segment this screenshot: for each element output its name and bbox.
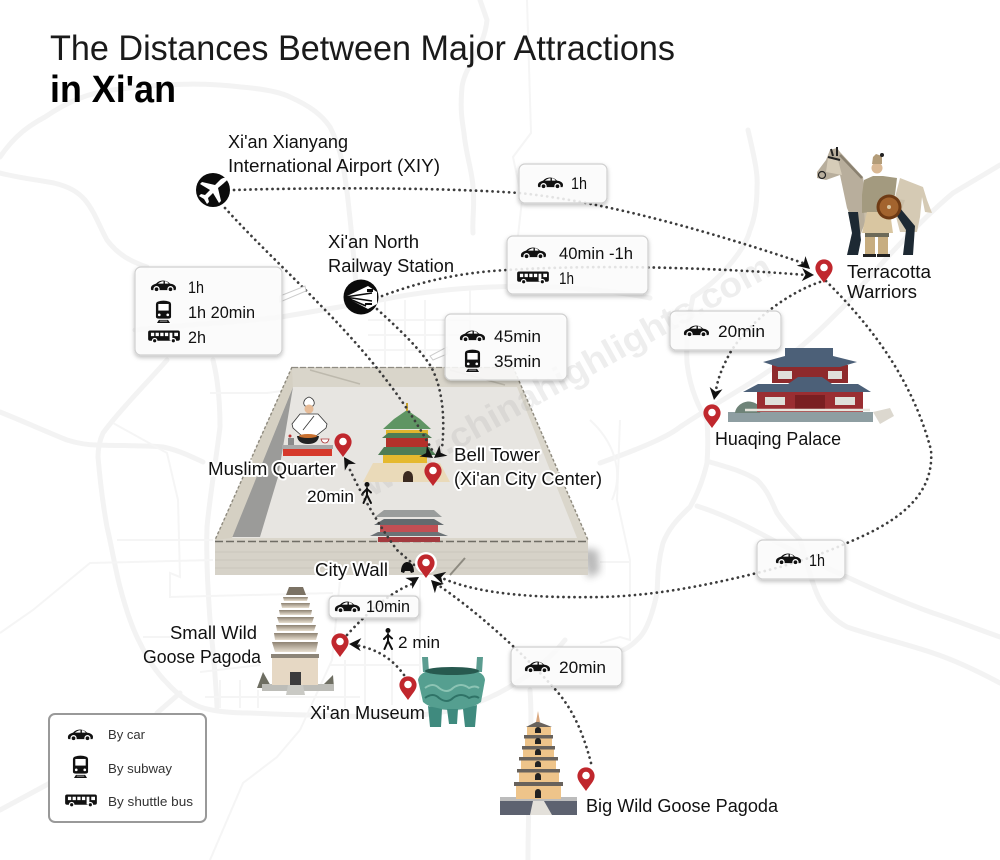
route: airport to Terracotta Warriors <box>234 188 806 264</box>
label: City Wall: City Wall <box>315 560 388 580</box>
legend: By car <box>108 727 146 742</box>
title <box>50 29 675 111</box>
card: airport to Bell Tower: 1h <box>188 278 204 297</box>
label: Terracotta Warriors: Warriors <box>847 282 917 302</box>
label: Huaqing Palace: Huaqing Palace <box>715 429 841 449</box>
label: Small Wild Goose Pagoda: Goose Pagoda <box>143 647 262 667</box>
label: Muslim Quarter: Muslim Quarter <box>208 459 336 479</box>
card: Small Wild Goose Pagoda to City Wall: 10min <box>366 597 410 616</box>
icon: walker to Xi'an Museum <box>384 628 392 649</box>
icon: airport <box>196 173 230 207</box>
label: Small Wild Goose Pagoda: Small Wild <box>170 623 257 643</box>
illustration: Big Wild Goose Pagoda <box>500 711 577 815</box>
label: 20min walk: 20min <box>307 487 354 506</box>
pin: Small Wild Goose Pagoda <box>331 633 349 657</box>
label: Terracotta Warriors: Terracotta <box>847 262 932 282</box>
label: Bell Tower <box>454 445 602 489</box>
label: airport: Xi'an Xianyang <box>228 132 348 152</box>
card: Terracotta Warriors to City Wall: 1h <box>809 551 825 570</box>
route: airport to Bell Tower <box>225 208 432 450</box>
route: Small Wild Goose Pagoda to City Wall <box>347 584 412 635</box>
label: 2 min walk: 2 min <box>398 633 440 652</box>
label: railway station <box>328 232 454 276</box>
route: railway station to Terracotta Warriors <box>382 267 806 296</box>
label: Big Wild Goose Pagoda: Big Wild Goose Pagoda <box>586 796 779 816</box>
card: airport to Terracotta Warriors <box>519 164 607 203</box>
card: railway station to Bell Tower: 35min <box>494 352 541 371</box>
card: Terracotta Warriors to Huaqing Palace <box>670 311 781 350</box>
pin: Xi'an Museum <box>399 676 417 700</box>
label: airport: International Airport (XIY) <box>228 156 440 176</box>
pin: Big Wild Goose Pagoda <box>577 767 595 791</box>
route: railway station to Bell Tower <box>377 309 443 448</box>
watermark: www.chinahighlights.com <box>356 247 778 505</box>
pin: Terracotta Warriors <box>815 259 833 283</box>
arrowheads <box>338 256 814 651</box>
illustration: terracotta warrior and horse <box>817 147 932 257</box>
card: railway station to Terracotta Warriors: 40min -1h <box>559 244 633 263</box>
illustration: chef at Muslim Quarter <box>282 397 333 456</box>
icon: City Wall marker <box>401 562 414 573</box>
card: Terracotta Warriors to City Wall <box>757 540 845 579</box>
illustration: Bell Tower <box>363 403 450 482</box>
illustration: city wall <box>215 367 600 578</box>
route: Xi'an Museum to Small Wild Goose Pagoda <box>356 645 404 675</box>
label: Bell Tower: Bell Tower <box>454 445 540 465</box>
card: Big Wild Goose Pagoda to City Wall: 20min <box>559 658 606 677</box>
title: in Xi'an <box>50 69 176 111</box>
illustration: Huaqing Palace <box>728 348 894 424</box>
pin: Muslim Quarter <box>334 433 352 457</box>
legend <box>49 714 206 822</box>
label: Terracotta Warriors <box>847 262 932 302</box>
label: Xi'an Museum: Xi'an Museum <box>310 703 425 723</box>
legend: By shuttle bus <box>108 794 194 809</box>
route: Terracotta Warriors to Huaqing Palace <box>716 282 820 390</box>
route: Big Wild Goose Pagoda to City Wall <box>438 585 591 763</box>
card: Terracotta Warriors to Huaqing Palace: 20min <box>718 322 765 341</box>
card: railway station to Terracotta Warriors: 1h <box>559 269 574 288</box>
illustration: bronze ding at Xi'an Museum <box>418 657 485 727</box>
pin: Huaqing Palace <box>703 404 721 428</box>
card: railway station to Bell Tower <box>430 314 567 380</box>
card: airport to Bell Tower: 2h <box>188 328 206 347</box>
title: The Distances Between Major Attractions <box>50 29 675 68</box>
illustration: gate tower on the wall <box>370 510 448 542</box>
card: airport to Terracotta Warriors: 1h <box>571 174 587 193</box>
card: Small Wild Goose Pagoda to City Wall <box>329 596 419 618</box>
label: Small Wild Goose Pagoda <box>143 623 262 667</box>
card: airport to Bell Tower <box>135 267 306 355</box>
label: airport <box>228 132 440 176</box>
icon: walker to Muslim Quarter <box>363 482 371 503</box>
route: Muslim Quarter to City Wall <box>350 470 420 570</box>
card: Big Wild Goose Pagoda to City Wall <box>511 647 622 686</box>
illustration: Small Wild Goose Pagoda <box>257 587 334 695</box>
card: railway station to Bell Tower: 45min <box>494 327 541 346</box>
label: railway station: Railway Station <box>328 256 454 276</box>
pin: City Wall <box>415 552 437 578</box>
icon: railway station <box>344 280 378 314</box>
card: railway station to Terracotta Warriors <box>507 236 648 294</box>
pin: Bell Tower <box>424 462 442 486</box>
legend: By subway <box>108 761 172 776</box>
label: Bell Tower: (Xi'an City Center) <box>454 469 602 489</box>
card: airport to Bell Tower: 1h 20min <box>188 303 255 322</box>
route: Terracotta Warriors to City Wall <box>442 281 931 597</box>
label: railway station: Xi'an North <box>328 232 419 252</box>
